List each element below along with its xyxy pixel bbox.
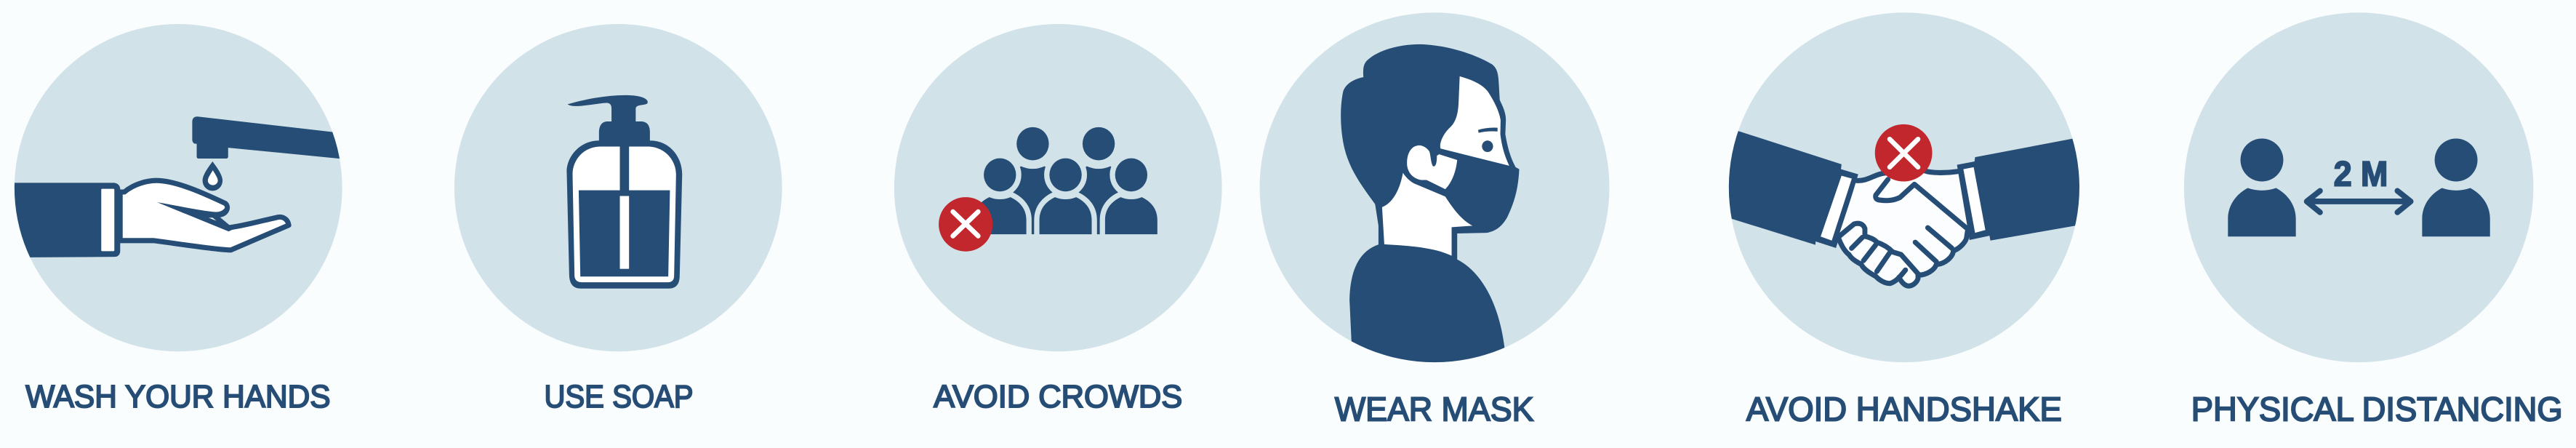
background circle: crowds — [894, 24, 1222, 351]
icon: sleeve and cuff — [11, 183, 120, 257]
panel: wash your hands — [11, 24, 345, 415]
panel: use soap — [454, 24, 782, 415]
panel: wear mask — [1260, 12, 1610, 428]
panel: physical distancing — [2184, 12, 2563, 428]
icon: crowd of people — [973, 127, 1162, 241]
label: avoid crowds: AVOID CROWDS — [934, 379, 1182, 415]
label: avoid handshake: AVOID HANDSHAKE — [1746, 391, 2062, 428]
icon: right sleeve — [1957, 137, 2084, 241]
icon: left sleeve — [1722, 126, 1858, 248]
background circle: distancing — [2184, 12, 2533, 362]
icon: person wearing mask — [1341, 44, 1520, 372]
icon: red cross badge — [939, 197, 992, 252]
distance value: 2 M — [2334, 155, 2388, 194]
background circle: soap — [454, 24, 782, 351]
icon: soap dispenser — [566, 95, 682, 289]
label: wash your hands: WASH YOUR HANDS — [25, 379, 331, 415]
label: use soap: USE SOAP — [544, 379, 694, 415]
label: physical distancing: PHYSICAL DISTANCING — [2191, 391, 2563, 428]
arrow: two metres — [2307, 191, 2411, 212]
icon: water drop — [203, 161, 222, 191]
background circle: wash hands — [15, 24, 342, 351]
icon: water tap — [192, 116, 345, 159]
icon: shaking hands — [1838, 171, 1968, 286]
panel: avoid handshake — [1722, 12, 2084, 428]
panel: avoid crowds — [894, 24, 1222, 415]
icon: open hand — [120, 180, 289, 250]
label: wear mask: WEAR MASK — [1335, 391, 1533, 428]
icon: red cross badge — [1875, 124, 1933, 181]
icon: right person — [2422, 139, 2490, 236]
background circle: mask — [1260, 12, 1610, 362]
background circle: handshake — [1729, 12, 2079, 362]
icon: left person — [2228, 139, 2296, 236]
